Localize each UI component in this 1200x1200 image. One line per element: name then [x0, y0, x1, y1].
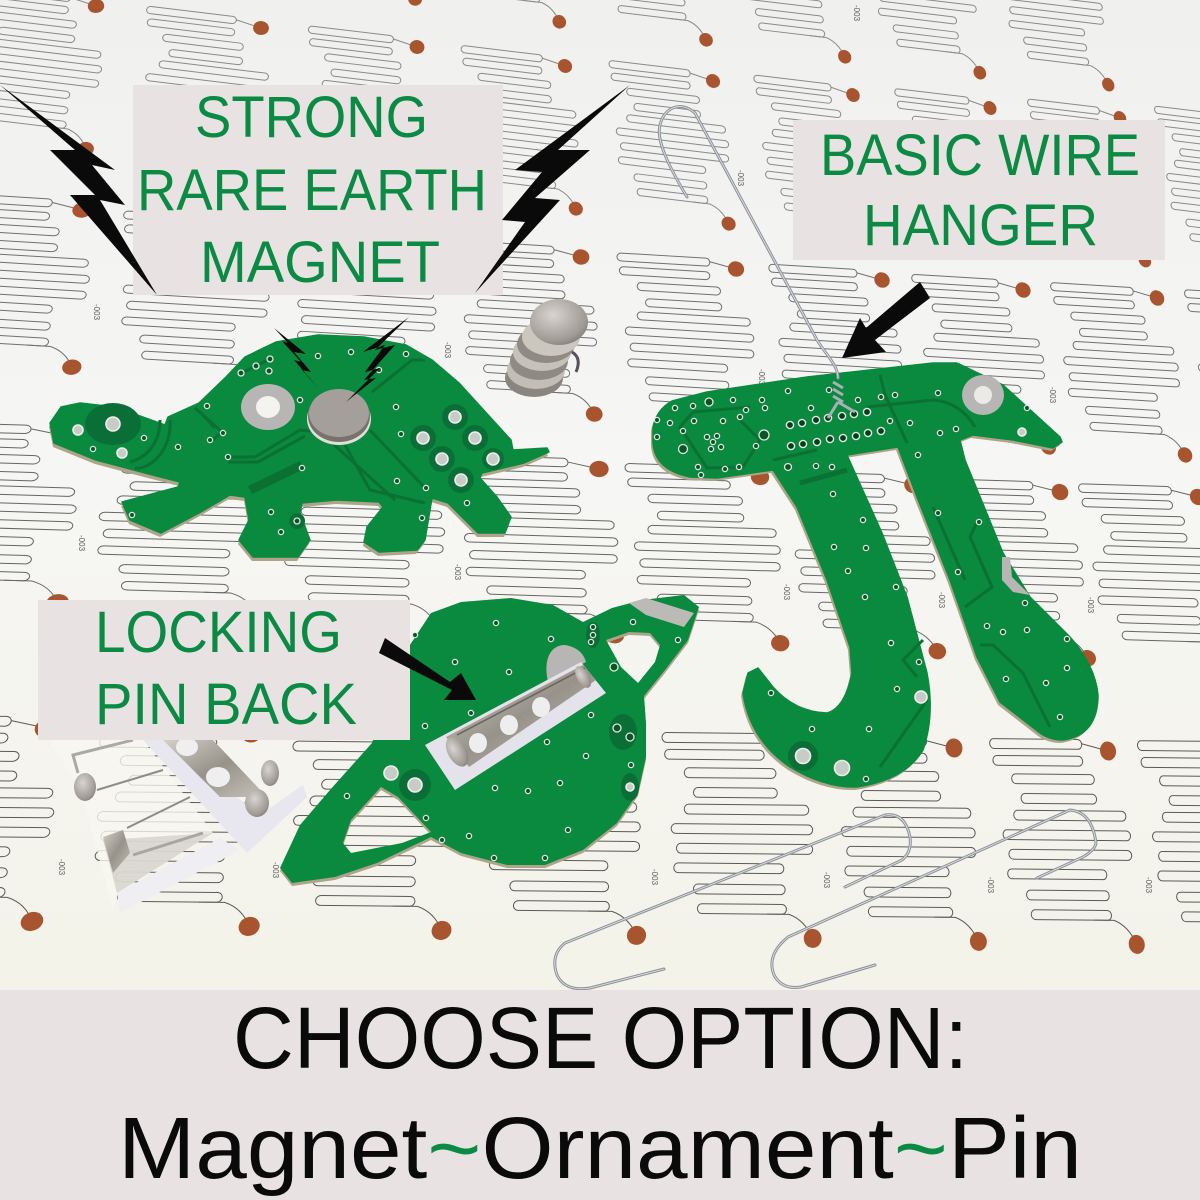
background: circuit paper with serpentine traces: -003 [1144, 877, 1153, 894]
paper clip hanger 2 [772, 810, 1096, 988]
background: circuit paper with serpentine traces: -003 [937, 592, 946, 609]
panel: strong rare earth magnet label: RARE EARTH [137, 158, 487, 223]
background: circuit paper with serpentine traces: -003 [650, 869, 659, 886]
text: magnet ornament pin: Magnet~Ornament ~Pin [118, 1100, 1082, 1197]
background: circuit paper with serpentine traces: -003 [453, 564, 462, 581]
turtle head pad [85, 403, 141, 445]
background: circuit paper with serpentine traces: -003 [782, 584, 791, 601]
panel: strong rare earth magnet label [133, 85, 503, 295]
arrow: to wire hanger [842, 282, 930, 358]
panel: locking pin back label: LOCKING [95, 600, 342, 665]
panel: strong rare earth magnet label: MAGNET [200, 230, 440, 295]
background: circuit paper with serpentine traces: -003 [271, 862, 280, 879]
panel: choose option footer [0, 990, 1200, 1200]
panel: strong rare earth magnet label: STRONG [195, 85, 428, 150]
icon: left lightning bolt [0, 85, 157, 295]
background: circuit paper with serpentine traces: -003 [852, 5, 861, 22]
magnet stack [505, 299, 588, 397]
background: circuit paper with serpentine traces: -003 [1086, 597, 1095, 614]
panel: basic wire hanger label [793, 120, 1165, 260]
pi circuit board [651, 363, 1098, 790]
pin back on saturn [425, 662, 606, 790]
panel: basic wire hanger label: HANGER [863, 193, 1098, 258]
background: circuit paper with serpentine traces: -003 [92, 304, 101, 321]
turtle circuit board [49, 335, 549, 561]
panel: locking pin back label: PIN BACK [95, 672, 357, 737]
background: circuit paper with serpentine traces: -003 [57, 859, 66, 876]
background: circuit paper with serpentine traces: -003 [77, 535, 86, 552]
background: circuit paper with serpentine traces: -003 [757, 369, 766, 386]
heading: choose option: CHOOSE OPTION: [233, 990, 968, 1087]
panel: basic wire hanger label: BASIC WIRE [820, 123, 1140, 188]
icon: right lightning bolt [475, 85, 630, 293]
paper clip hanger 1 [555, 815, 910, 989]
saturn circuit board [280, 595, 699, 886]
wire hanger [659, 107, 855, 418]
panel: locking pin back label [38, 600, 410, 740]
background: circuit paper with serpentine traces: -003 [1048, 387, 1057, 404]
background: circuit paper with serpentine traces: -003 [736, 170, 745, 187]
background: circuit paper with serpentine traces: -003 [986, 877, 995, 894]
background: circuit paper with serpentine traces: -003 [443, 342, 452, 359]
background: circuit paper with serpentine traces: -003 [822, 872, 831, 889]
arrow: to pin back [379, 638, 476, 700]
magnet on turtle [307, 389, 371, 445]
pile of pin backs [50, 738, 307, 913]
small lightning bolts on turtle [274, 317, 409, 402]
